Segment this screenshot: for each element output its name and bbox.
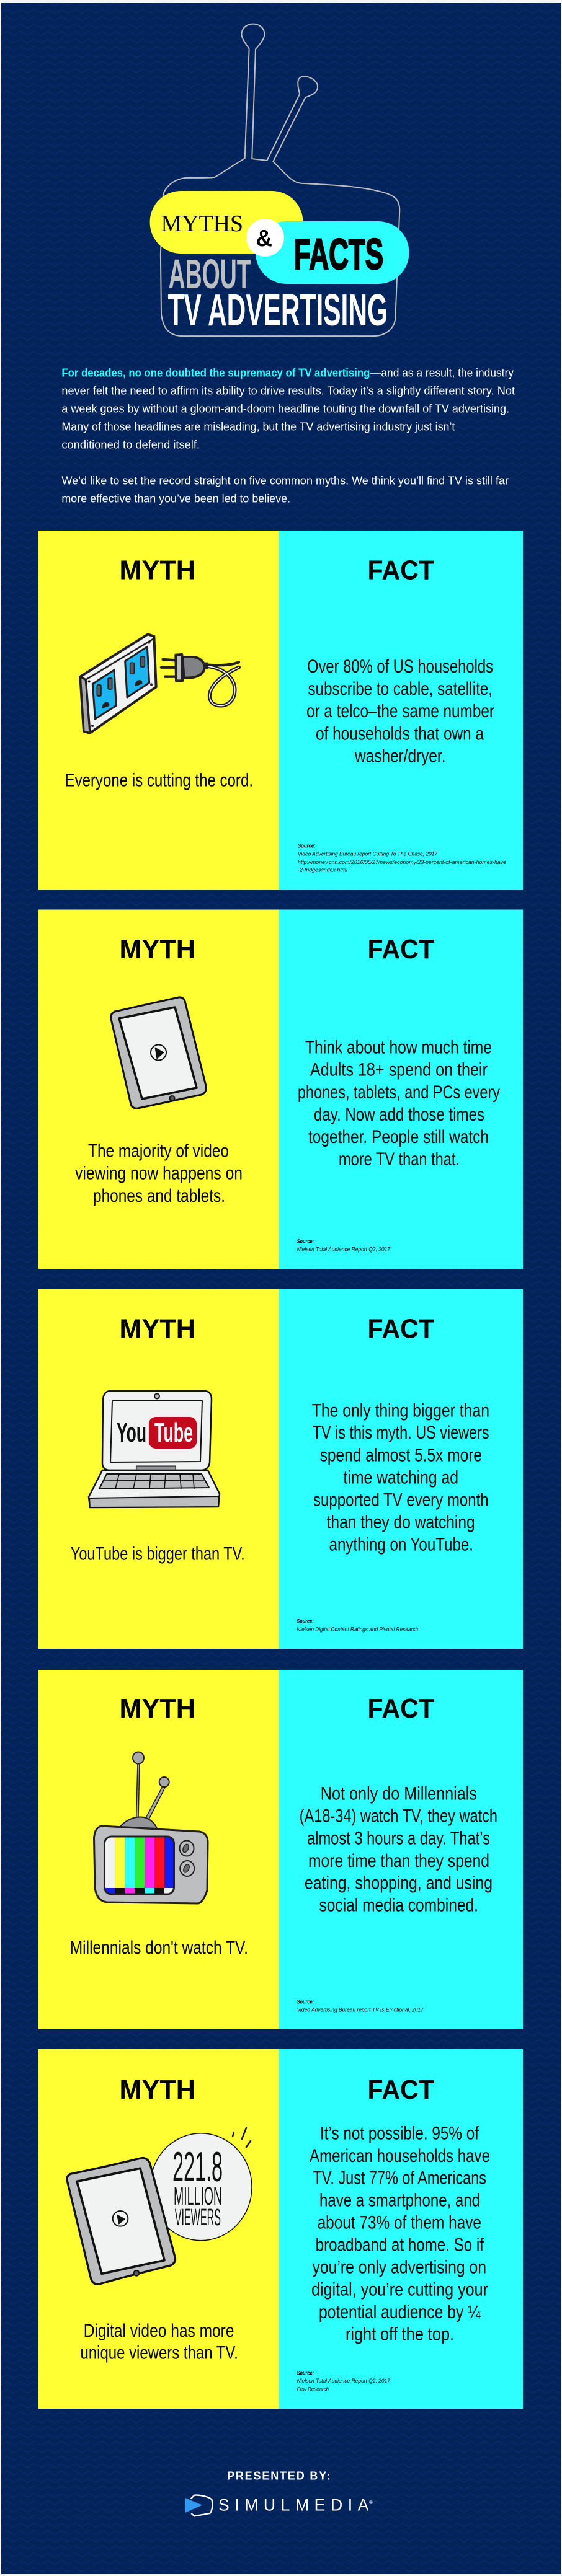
myth line 1: Digital video has more (84, 2321, 234, 2341)
fact statement (298, 1038, 500, 1170)
source label: Source: (297, 2370, 314, 2376)
fact line 1: Over 80% of US households (307, 656, 493, 677)
fact line 2: Adults 18+ spend on their (310, 1060, 488, 1080)
fact line 5: about 73% of them have (318, 2213, 481, 2233)
intro line 7: more effective than you’ve been led to believe. (61, 492, 290, 505)
icon: tablet with viewers bubble: VIEWERS (175, 2205, 221, 2231)
intro line 3: a week goes by without a gloom-and-doom headline touting the downfall of TV advertising. (61, 402, 509, 415)
fact line 5: supported TV every month (313, 1490, 489, 1510)
source line 2: http://money.cnn.com/2016/05/27/news/economy/23-percent-of-american-homes-have (298, 859, 506, 866)
heading: FACT: FACT (367, 1693, 434, 1724)
source line: Nielsen Digital Content Ratings and Pivotal Research (297, 1626, 418, 1633)
fact column (279, 1289, 523, 1649)
heading: MYTH: MYTH (119, 1314, 195, 1344)
panel: myth and fact 4 (38, 1670, 523, 2029)
myth column (38, 910, 279, 1269)
source line 1: Nielsen Total Audience Report Q2, 2017 (297, 2378, 391, 2384)
YouTube logo word: You: You (117, 1418, 146, 1448)
icon: Simulmedia logo mark (185, 2495, 212, 2516)
intro line 2: never felt the need to affirm its ability to drive results. Today it’s a slightly different story. Not (61, 384, 515, 397)
fact statement (306, 656, 494, 767)
fact line 4: day. Now add those times (314, 1105, 484, 1125)
source label: Source: (297, 1238, 314, 1245)
source note (297, 1998, 424, 2013)
fact line 2: subscribe to cable, satellite, (308, 679, 493, 699)
fact line 6: more TV than that. (339, 1149, 460, 1170)
cyan pill (256, 221, 409, 284)
myth line 3: phones and tablets. (93, 1186, 225, 1206)
myth line 2: unique viewers than TV. (81, 2343, 238, 2363)
myth column (38, 531, 279, 890)
intro text (61, 366, 515, 505)
title word: ABOUT: ABOUT (169, 251, 251, 298)
source line 1: Video Advertising Bureau report Cutting To The Chase, 2017 (298, 851, 438, 858)
heading: MYTH: MYTH (119, 934, 195, 964)
source label: Source: (297, 1998, 314, 2005)
source note (298, 843, 506, 874)
footer: presented by (185, 2470, 373, 2516)
YouTube logo word: Tube: Tube (154, 1418, 193, 1448)
icon: tablet with viewers bubble: 221.8 (172, 2143, 223, 2190)
source line 3: -2-fridges/index.html (298, 867, 348, 874)
intro line 6: We’d like to set the record straight on five common myths. We think you’ll find TV is still far (61, 474, 509, 487)
source note (297, 2370, 391, 2393)
fact line 2: TV is this myth. US viewers (313, 1423, 489, 1443)
panel: myth and fact 3 (38, 1289, 523, 1649)
fact line 7: you’re only advertising on (313, 2257, 486, 2278)
registered mark: ® (369, 2500, 373, 2505)
icon: laptop showing YouTube (89, 1391, 220, 1507)
heading: MYTH: MYTH (119, 555, 195, 586)
heading: FACT: FACT (367, 934, 434, 964)
fact line 3: almost 3 hours a day. That’s (307, 1828, 490, 1848)
fact line 10: right off the top. (346, 2324, 454, 2344)
fact line 5: washer/dryer. (354, 746, 445, 767)
fact statement (310, 2124, 490, 2344)
fact line 5: together. People still watch (308, 1127, 489, 1147)
heading: FACT: FACT (367, 2075, 434, 2105)
fact line 3: phones, tablets, and PCs every (298, 1082, 500, 1103)
fact line 2: American households have (310, 2146, 490, 2166)
presented by label: PRESENTED BY: (227, 2470, 331, 2482)
myth statement: Everyone is cutting the cord. (65, 770, 253, 791)
icon: retro TV with colour bars (94, 1752, 208, 1903)
icon: TV outline with antennas (161, 24, 399, 336)
fact line 7: anything on YouTube. (329, 1534, 473, 1555)
source label: Source: (297, 1618, 314, 1625)
intro highlight: For decades, no one doubted the supremacy of TV advertising (61, 366, 370, 379)
panel: myth and fact 1 (38, 531, 523, 890)
fact statement (312, 1400, 489, 1555)
fact statement (300, 1784, 497, 1915)
fact line 9: potential audience by ¼ (319, 2302, 481, 2322)
fact line 3: or a telco–the same number (306, 701, 494, 721)
panel: myth and fact 5 (38, 2049, 523, 2409)
fact line 4: have a smartphone, and (319, 2190, 480, 2210)
fact column (279, 1670, 523, 2029)
source label: Source: (298, 843, 316, 849)
intro line 5: conditioned to defend itself. (61, 438, 200, 451)
fact column (279, 2049, 523, 2409)
intro line 1: —and as a result, the industry (370, 366, 514, 379)
fact column (279, 531, 523, 890)
title word: ampersand: & (256, 226, 272, 252)
fact line 1: The only thing bigger than (312, 1400, 489, 1421)
heading: FACT: FACT (367, 1314, 434, 1344)
fact line 5: eating, shopping, and using (305, 1873, 493, 1894)
source line: Nielsen Total Audience Report Q2, 2017 (297, 1246, 391, 1253)
fact line 3: TV. Just 77% of Americans (313, 2168, 486, 2189)
fact line 3: spend almost 5.5x more (320, 1445, 482, 1465)
fact line 6: social media combined. (319, 1895, 478, 1915)
emphasis ticks (233, 2128, 251, 2147)
myth column (38, 1670, 279, 2029)
myth statement: Millennials don't watch TV. (70, 1938, 248, 1958)
title words: TV ADVERTISING: TV ADVERTISING (167, 285, 388, 335)
fact line 1: Think about how much time (305, 1038, 492, 1057)
icon: tablet with play button (111, 997, 206, 1108)
source note (297, 1238, 391, 1253)
fact line 1: Not only do Millennials (321, 1784, 477, 1804)
heading: MYTH: MYTH (119, 2075, 195, 2105)
fact line 2: (A18-34) watch TV, they watch (300, 1806, 497, 1827)
heading: FACT: FACT (367, 555, 434, 586)
fact line 6: broadband at home. So if (316, 2234, 484, 2255)
fact line 1: It’s not possible. 95% of (320, 2124, 479, 2143)
fact line 8: digital, you’re cutting your (311, 2280, 488, 2300)
title block: TV outline with title (150, 24, 409, 336)
white ampersand circle (246, 219, 284, 257)
fact line 4: time watching ad (344, 1467, 458, 1488)
title word: MYTHS: MYTHS (161, 211, 243, 237)
fact line 6: than they do watching (327, 1512, 475, 1533)
fact column (279, 910, 523, 1269)
myth statement (81, 2321, 238, 2363)
fact line 4: of households that own a (316, 724, 484, 744)
YouTube logo red box (149, 1417, 197, 1449)
yellow pill (150, 191, 303, 254)
icon: tablet with viewers bubble: MILLION (174, 2181, 222, 2210)
tablet (67, 2158, 175, 2284)
fact line 4: more time than they spend (308, 1851, 489, 1871)
source line 2: Pew Research (297, 2386, 329, 2393)
bubble (150, 2133, 252, 2241)
myth statement (75, 1140, 243, 1206)
myth column (38, 1289, 279, 1649)
myth line 2: viewing now happens on (75, 1163, 243, 1184)
icon: tablet with viewers bubble (67, 2128, 252, 2284)
source note (297, 1618, 418, 1633)
heading: MYTH: MYTH (119, 1693, 195, 1724)
logo wordmark: SIMULMEDIA (218, 2496, 369, 2515)
icon: wall outlet and plug (80, 634, 239, 733)
panel: myth and fact 2 (38, 910, 523, 1269)
intro line 4: Many of those headlines are misleading, but the TV advertising industry just isn’t (61, 420, 455, 433)
myth statement: YouTube is bigger than TV. (71, 1543, 245, 1564)
myth line 1: The majority of video (88, 1140, 229, 1162)
source line: Video Advertising Bureau report TV Is Emotional, 2017 (297, 2006, 424, 2013)
title word: FACTS: FACTS (294, 230, 383, 278)
myth column (38, 2049, 279, 2409)
